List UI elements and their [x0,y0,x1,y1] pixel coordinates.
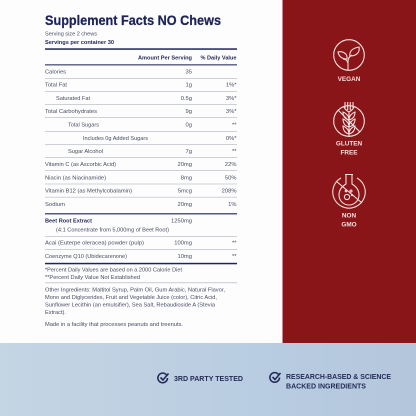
icon: check 3rd party [158,373,168,383]
table: 208% [222,189,236,195]
label: non gmo: NON [342,212,356,219]
panel: red claims [282,0,416,343]
other ingredients: Extract). [45,310,66,316]
icon: gluten free [334,102,364,137]
other ingredients: Other Ingredients: Maltitol Syrup, Palm Oil, Gum Arabic, Natural Flavor, [45,288,225,294]
table: Niacin (as Niacinamide) [45,176,106,182]
panel: supplement facts [45,12,237,328]
table: Total Sugars [68,122,99,128]
table: 35 [186,70,192,76]
icon: vegan [334,40,364,70]
table: ** [232,254,237,260]
label: non gmo [341,212,357,228]
table: 1g [186,83,192,89]
table: Total Carbohydrates [45,109,97,115]
label: gluten free: FREE [340,149,358,156]
table: 3%* [226,96,237,102]
other ingredients: Sunflower Lecithin (an emulsifier), Sea Salt, Rebaudioside A (Stevia [45,302,216,308]
table: 5mcg [178,189,192,195]
footnotes: *Percent Daily Values are based on a 2000 Calorie Diet [45,268,182,274]
icon: check research [270,373,280,382]
table: 0.5g [181,96,192,102]
table: Amount Per Serving [138,55,192,61]
table: Beet Root Extract [45,218,92,224]
table: 1%* [226,83,237,89]
table: 9g [186,109,192,115]
table [45,48,237,283]
table: 3%* [226,109,237,115]
serving info: Serving size 2 chews [45,32,97,38]
table: Vitamin C (as Ascorbic Acid) [45,162,116,168]
table: 50% [225,176,236,182]
text: research-based [286,372,391,390]
serving info: Servings per container 30 [45,40,114,46]
other ingredients: Mono and Diglycerides, Fruit and Vegetable Juice (color), Citric Acid, [45,295,217,301]
table: ** [232,122,237,128]
table: 0%* [226,136,237,142]
title: Supplement Facts NO Chews [45,12,221,28]
table: Acai (Euterpe oleracea) powder (pulp) [45,241,144,247]
text: 3rd party tested: 3RD PARTY TESTED [174,374,243,383]
allergen note: Made in a facility that processes peanuts and treenuts. [45,322,183,328]
table: 100mg [174,241,192,247]
table: 7g [186,149,192,155]
table: Sugar Alcohol [68,149,103,155]
footnotes [45,268,182,281]
serving info [45,32,114,46]
label: non gmo: GMO [341,221,357,228]
table: 10mg [177,254,192,260]
other ingredients [45,288,225,316]
table: Total Fat [45,83,67,89]
icon: non gmo [333,174,365,208]
table: ** [232,149,237,155]
text: research-based: BACKED INGREDIENTS [286,382,366,390]
table: 22% [225,162,236,168]
label: gluten free: GLUTEN [336,140,363,147]
panel: bottom band [0,343,416,416]
table: 1% [228,202,236,208]
table: (4:1 Concentrate from 5,000mg of Beet Root) [56,228,169,234]
text: research-based: RESEARCH-BASED & SCIENCE [286,372,391,381]
table: 1250mg [171,218,192,224]
footnotes: **Percent Daily Value Not Established [45,275,140,281]
table: Coenzyme Q10 (Ubidecarenone) [45,254,127,260]
table: 20mg [177,202,192,208]
label: gluten free [336,140,363,156]
table: % Daily Value [200,55,237,61]
table: Saturated Fat [56,96,90,102]
table: 0g [186,122,192,128]
table: Sodium [45,202,65,208]
table: 20mg [177,162,192,168]
table: ** [232,241,237,247]
table: Calories [45,70,66,76]
table: 8mg [181,176,192,182]
table: Includes 0g Added Sugars [83,136,148,142]
table: Vitamin B12 (as Methylcobalamin) [45,189,132,195]
label: vegan: VEGAN [338,76,361,83]
